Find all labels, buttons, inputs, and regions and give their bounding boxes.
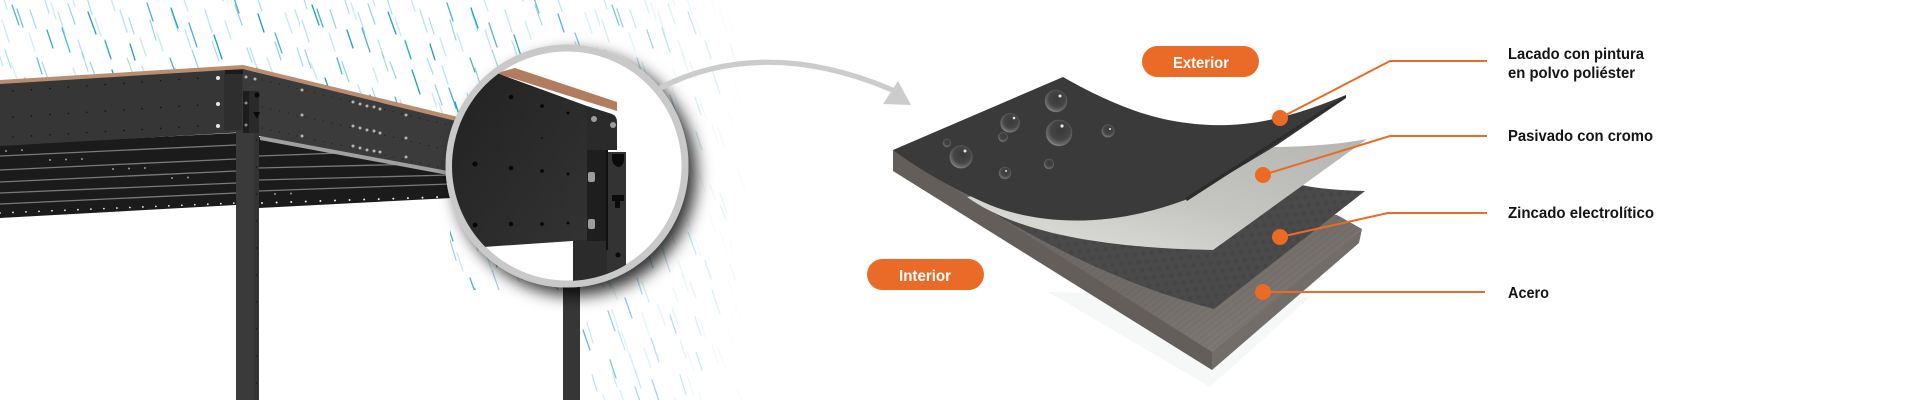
callout: steel: Acero (1508, 285, 1549, 302)
layered material (893, 77, 1367, 387)
beam holes (13, 76, 448, 169)
notches (612, 154, 624, 258)
callout: zinc (1272, 205, 1654, 245)
callout: powder coat: Lacado con pintura (1508, 46, 1644, 63)
badge: Exterior: Exterior (1173, 55, 1229, 72)
callout: chrome (1255, 128, 1653, 183)
steel layer (893, 150, 1362, 370)
floor shadow (1048, 292, 1310, 387)
water drops (943, 90, 1114, 179)
arrow to layers (660, 62, 911, 105)
bolts (588, 116, 616, 229)
left post (236, 132, 259, 400)
panel holes (472, 95, 570, 228)
callout: powder coat: en polvo poliéster (1508, 65, 1635, 82)
wood top strip (0, 65, 458, 121)
badge: Exterior (1142, 46, 1259, 77)
callout: chrome: Pasivado con cromo (1508, 128, 1653, 145)
badge: Interior: Interior (899, 268, 951, 285)
callout: powder coat (1272, 46, 1644, 126)
wood strip (490, 68, 617, 111)
side beam (243, 69, 456, 175)
callout: steel (1255, 284, 1549, 302)
front beam (0, 68, 246, 146)
lens ring (449, 48, 685, 284)
roof underside with slats (0, 133, 452, 218)
beam panel (452, 74, 587, 247)
right post (563, 280, 580, 400)
post (573, 149, 626, 290)
pergola structure (0, 65, 580, 400)
powder coat layer (893, 77, 1346, 221)
corner bracket (224, 70, 260, 133)
lens detail (452, 68, 626, 281)
zinc layer (967, 182, 1365, 309)
magnifier lens (440, 48, 685, 290)
bracket plate (587, 106, 617, 150)
light edge under side beam (260, 136, 448, 175)
badge: Interior (867, 259, 984, 290)
coat edge (1185, 95, 1346, 201)
callout: zinc: Zincado electrolítico (1508, 205, 1654, 222)
rain background (0, 0, 760, 400)
drop highlights (964, 94, 1111, 172)
chrome passivation layer (967, 139, 1367, 250)
